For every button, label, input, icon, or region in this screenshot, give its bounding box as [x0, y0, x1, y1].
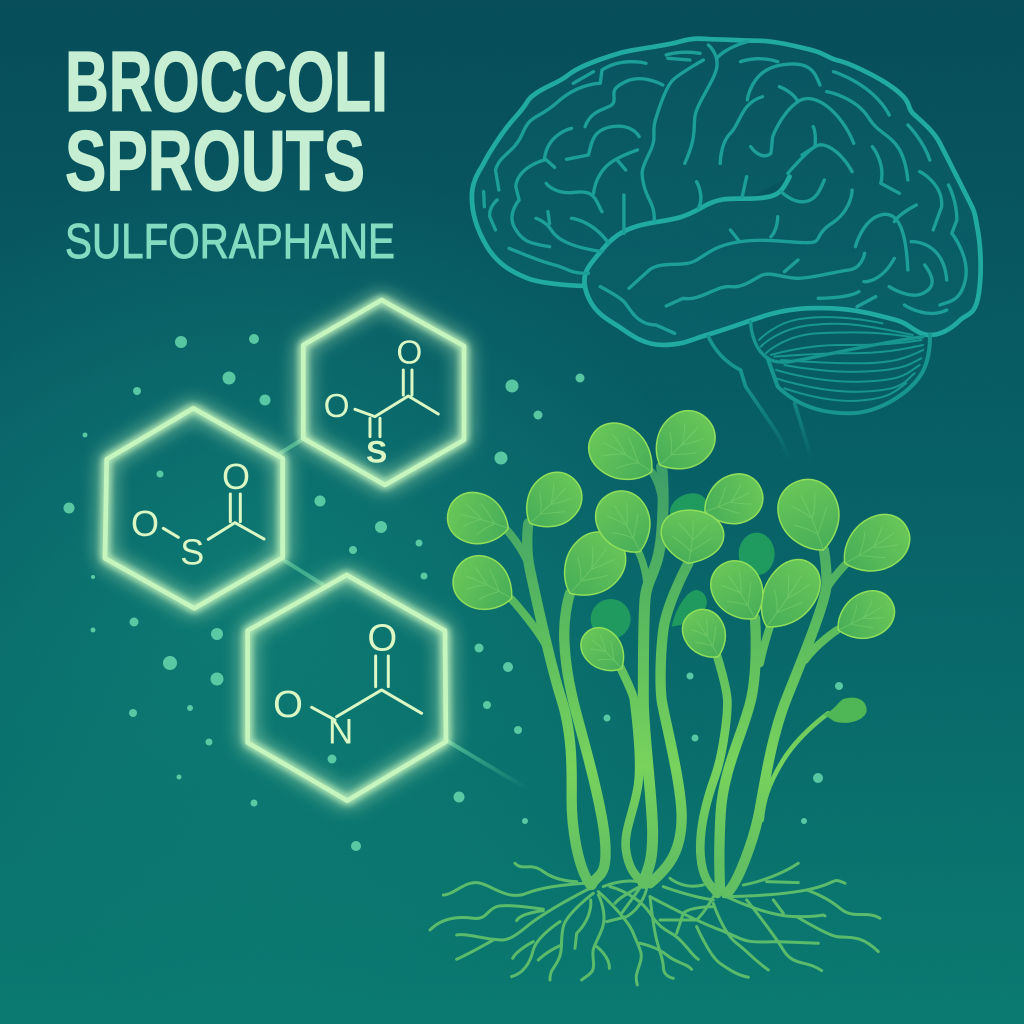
- brain outline: [472, 39, 981, 345]
- molecule C atoms: O: [367, 616, 397, 659]
- title: BROCCOLI SPROUTS: [65, 35, 388, 209]
- molecule B atoms: O: [222, 456, 250, 497]
- molecule B atoms: S: [180, 531, 204, 572]
- title: BROCCOLI SPROUTS: SPROUTS: [65, 114, 365, 209]
- stems: [507, 467, 847, 894]
- brain stem: [708, 337, 812, 460]
- brain sulci and gyri: [484, 42, 966, 333]
- molecule C bonds: [312, 656, 422, 720]
- molecule C atoms: O: [273, 683, 303, 726]
- hexagon C: [248, 575, 446, 801]
- molecule A atoms: [324, 335, 422, 469]
- title: BROCCOLI SPROUTS: BROCCOLI: [65, 35, 388, 130]
- background leaves: [591, 487, 775, 639]
- hexagon A: [303, 300, 464, 485]
- molecule B atoms: O: [131, 503, 159, 544]
- molecule C atoms: N: [328, 712, 353, 751]
- molecule C atoms: [273, 616, 397, 751]
- connector bonds: [280, 440, 527, 788]
- floating particles: [64, 334, 843, 851]
- molecule B bonds: [163, 494, 264, 539]
- subtitle: SULFORAPHANE: SULFORAPHANE: [65, 215, 395, 269]
- molecule B atoms: [131, 456, 250, 572]
- roots: [430, 863, 880, 985]
- bud leaf: [823, 698, 867, 723]
- molecule A atoms: O: [396, 335, 422, 372]
- molecule A bonds: [355, 370, 438, 437]
- leaves: [441, 400, 920, 682]
- brain illustration: [472, 39, 981, 460]
- cerebellum: [751, 317, 930, 413]
- hexagon B: [105, 408, 283, 608]
- molecule A atoms: O: [324, 388, 350, 425]
- molecule network: [105, 300, 527, 801]
- sprouts illustration: [430, 400, 920, 985]
- molecule A atoms: S: [366, 433, 387, 469]
